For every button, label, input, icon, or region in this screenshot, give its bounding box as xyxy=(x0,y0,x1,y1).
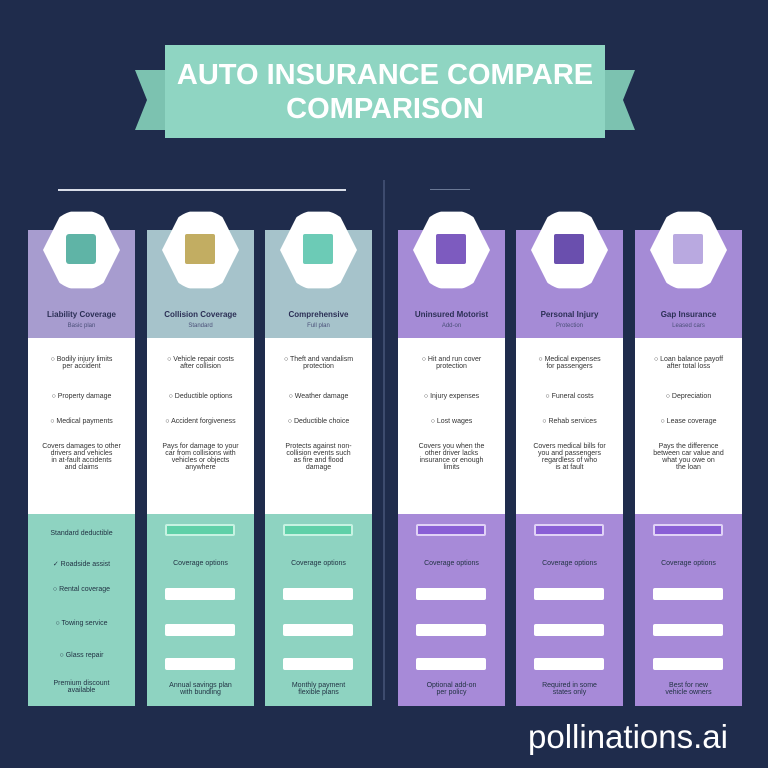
column 4: insurance or enough xyxy=(420,457,483,464)
column 5: Required in some xyxy=(542,682,597,689)
column 4: other driver lacks xyxy=(425,450,478,457)
column 1: Covers damages to other xyxy=(42,443,121,450)
icon xyxy=(303,234,333,264)
column 3: ○ Theft and vandalism xyxy=(284,356,353,363)
column 1: ✓ Roadside assist xyxy=(53,561,110,568)
column 2: Coverage options xyxy=(173,560,228,567)
column 2: ○ Deductible options xyxy=(169,393,232,400)
column 4: Coverage options xyxy=(424,560,479,567)
column 5: Coverage options xyxy=(542,560,597,567)
column 1: Premium discount xyxy=(53,680,110,687)
column 1: ○ Property damage xyxy=(52,393,111,400)
title text xyxy=(165,45,605,138)
watermark: pollinations.ai xyxy=(528,718,728,755)
column 1: in at-fault accidents xyxy=(51,457,112,464)
column 6: Best for new xyxy=(669,682,708,689)
column 1: per accident xyxy=(62,363,101,370)
column 2: car from collisions with xyxy=(165,450,236,457)
column 2: after collision xyxy=(180,363,221,370)
column 3: Protects against non- xyxy=(285,443,352,450)
column 3: protection xyxy=(303,363,334,370)
column 1: Standard deductible xyxy=(50,530,113,537)
column 4: Add-on xyxy=(442,323,461,329)
column 2: anywhere xyxy=(185,464,216,471)
column 6: Pays the difference xyxy=(659,443,718,450)
column 6: vehicle owners xyxy=(665,689,712,696)
column 6: after total loss xyxy=(667,363,710,370)
column 4: limits xyxy=(444,464,459,471)
column 2: ○ Vehicle repair costs xyxy=(167,356,234,363)
column 5 xyxy=(516,212,623,706)
column 2: Collision Coverage xyxy=(164,310,237,319)
column 3: as fire and flood xyxy=(294,457,343,464)
icon xyxy=(554,234,584,264)
column 6: between car value and xyxy=(653,450,724,457)
column 3: collision events such xyxy=(286,450,351,457)
column 3: flexible plans xyxy=(298,689,339,696)
column 6: Gap Insurance xyxy=(661,310,716,319)
column 3: damage xyxy=(306,464,331,471)
column 3: ○ Deductible choice xyxy=(288,418,349,425)
column 4 xyxy=(398,212,505,706)
column 1: and claims xyxy=(65,464,98,471)
ribbon tails xyxy=(135,70,165,130)
column 1: available xyxy=(68,687,95,694)
column 4: Uninsured Motorist xyxy=(415,310,488,319)
column 1: ○ Rental coverage xyxy=(53,586,110,593)
icon xyxy=(66,234,96,264)
column 5: Personal Injury xyxy=(541,310,598,319)
column 5: Protection xyxy=(556,323,583,329)
column 6: Coverage options xyxy=(661,560,716,567)
title text: AUTO INSURANCE COMPARE xyxy=(177,59,593,91)
column 2: vehicles or objects xyxy=(172,457,229,464)
column 3 xyxy=(265,212,372,706)
column 5: is at fault xyxy=(555,464,584,471)
column 5: ○ Funeral costs xyxy=(545,393,594,400)
column 4: per policy xyxy=(437,689,466,696)
column 2: Pays for damage to your xyxy=(162,443,239,450)
column 1: ○ Glass repair xyxy=(60,652,103,659)
column 4: Optional add-on xyxy=(427,682,476,689)
column 2: ○ Accident forgiveness xyxy=(165,418,236,425)
column 1: drivers and vehicles xyxy=(51,450,112,457)
column 1 xyxy=(28,212,135,706)
column 1: ○ Medical payments xyxy=(50,418,113,425)
title banner xyxy=(135,45,635,138)
column 4: ○ Injury expenses xyxy=(424,393,479,400)
column 6: what you owe on xyxy=(662,457,715,464)
column 1: ○ Towing service xyxy=(56,620,107,627)
icon xyxy=(673,234,703,264)
icon xyxy=(185,234,215,264)
column 6: ○ Depreciation xyxy=(666,393,711,400)
divider lines xyxy=(58,189,346,191)
column 2: Standard xyxy=(188,323,213,329)
column 5: ○ Medical expenses xyxy=(538,356,601,363)
column 4: ○ Hit and run cover xyxy=(422,356,481,363)
column 2: with bundling xyxy=(180,689,221,696)
title text: COMPARISON xyxy=(286,93,484,125)
column 3: Coverage options xyxy=(291,560,346,567)
column 2 xyxy=(147,212,254,706)
column 3: Monthly payment xyxy=(292,682,345,689)
column 6: ○ Lease coverage xyxy=(660,418,716,425)
column 5: states only xyxy=(553,689,586,696)
column 5: Covers medical bills for xyxy=(533,443,606,450)
column 4: Covers you when the xyxy=(419,443,484,450)
column 3: Full plan xyxy=(307,323,330,329)
column 1: Liability Coverage xyxy=(47,310,116,319)
column 4: ○ Lost wages xyxy=(431,418,472,425)
column 1: ○ Bodily injury limits xyxy=(51,356,112,363)
column 5: for passengers xyxy=(546,363,593,370)
column 1: Basic plan xyxy=(68,323,95,329)
column 3: ○ Weather damage xyxy=(289,393,348,400)
column 6: ○ Loan balance payoff xyxy=(654,356,723,363)
column 5: regardless of who xyxy=(542,457,597,464)
column 5: you and passengers xyxy=(538,450,601,457)
column 6: Leased cars xyxy=(672,323,705,329)
column 6 xyxy=(635,212,742,706)
column 6: the loan xyxy=(676,464,701,471)
icon xyxy=(436,234,466,264)
column 4: protection xyxy=(436,363,467,370)
column 3: Comprehensive xyxy=(288,310,349,319)
column 2: Annual savings plan xyxy=(169,682,232,689)
column 5: ○ Rehab services xyxy=(542,418,597,425)
